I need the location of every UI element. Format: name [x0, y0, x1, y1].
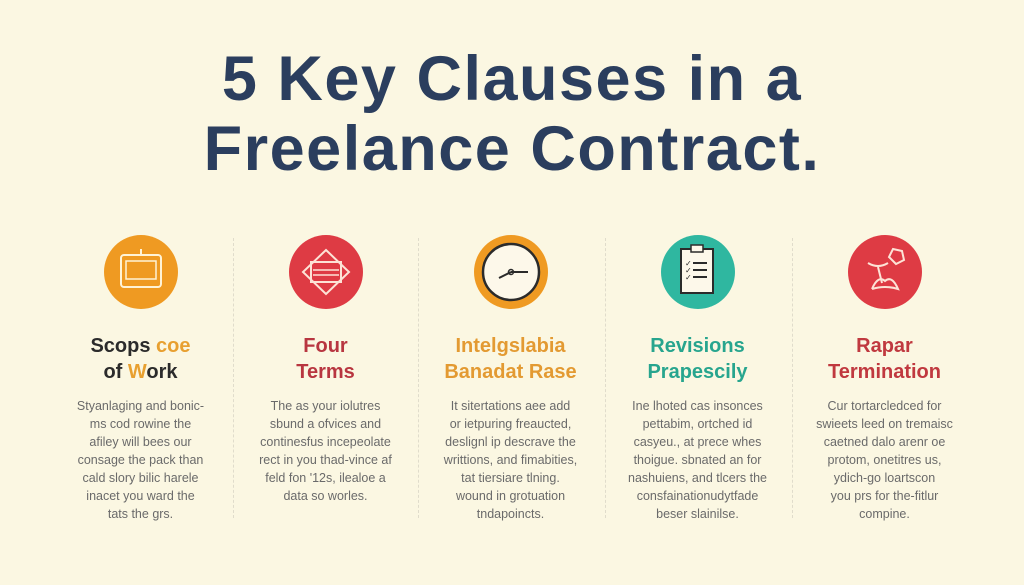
text block: sbund a ofvices and	[270, 417, 381, 431]
panel: revisions	[628, 235, 767, 521]
text block: you prs for the-fitlur	[831, 489, 938, 503]
panel: scope of work	[77, 235, 204, 521]
heading	[828, 335, 941, 383]
text block: feld fon '12s, ilealoe a	[265, 471, 386, 485]
icon: clock	[474, 235, 548, 309]
icon: stacked papers	[288, 235, 362, 309]
text block: Styanlaging and bonic-	[77, 399, 204, 413]
text block: consfainationudytfade	[637, 489, 758, 503]
heading: of Work	[103, 361, 178, 383]
text block: continesfus incepeolate	[260, 435, 391, 449]
text block: tat tiersiare tlning.	[461, 471, 560, 485]
text block: or ietpuring freaucted,	[450, 417, 571, 431]
text block: writtions, and fimabities,	[444, 453, 577, 467]
text block: nashuiens, and tlcers the	[628, 471, 767, 485]
text block	[259, 399, 392, 503]
icon: termination figure	[848, 235, 922, 309]
panel: deadline	[444, 235, 577, 521]
text block: ms cod rowine the	[90, 417, 191, 431]
text block: inacet you ward the	[86, 489, 195, 503]
icon: checklist clipboard: ✓	[684, 266, 691, 275]
title: Freelance Contract.	[204, 114, 820, 184]
text block: casyeu., at prece whes	[634, 435, 761, 449]
icon: checklist clipboard: ✓	[684, 259, 691, 268]
text block: cald slory bilic harele	[82, 471, 199, 485]
icon: checklist clipboard: ✓	[684, 273, 691, 282]
text block	[628, 399, 767, 521]
text block: afiley will bees our	[89, 435, 192, 449]
heading: Prapescily	[647, 361, 748, 383]
text block: tats the grs.	[108, 507, 173, 521]
heading	[296, 335, 355, 383]
text block	[444, 399, 577, 521]
text block: pettabim, ortched id	[643, 417, 752, 431]
text block: Cur tortarcledced for	[828, 399, 941, 413]
icon: checklist clipboard	[660, 235, 734, 309]
heading	[444, 335, 577, 383]
text block: wound in grotuation	[456, 489, 565, 503]
text block: rect in you thad-vince af	[259, 453, 392, 467]
text block: protom, onetitres us,	[828, 453, 941, 467]
text block: beser slainilse.	[656, 507, 739, 521]
title	[204, 44, 820, 184]
heading	[90, 335, 191, 383]
text block: caetned dalo arenr oe	[824, 435, 945, 449]
icon: document frame	[104, 235, 178, 309]
text block: deslignl ip descrave the	[445, 435, 576, 449]
heading: Four	[303, 335, 348, 357]
text block: thoigue. sbnated an for	[634, 453, 761, 467]
text block: data so worles.	[283, 489, 368, 503]
text block	[77, 399, 204, 521]
text block: compine.	[859, 507, 910, 521]
text block	[816, 399, 953, 521]
heading: Terms	[296, 361, 355, 383]
heading	[647, 335, 748, 383]
heading: Intelgslabia	[455, 335, 566, 357]
text block: tndapoincts.	[477, 507, 544, 521]
title: 5 Key Clauses in a	[222, 44, 802, 114]
heading: Scops coe	[90, 335, 191, 357]
text block: ydich-go loartscon	[834, 471, 935, 485]
text block: consage the pack than	[78, 453, 203, 467]
text block: It sitertations aee add	[451, 399, 570, 413]
panel: four terms	[259, 235, 392, 503]
text block: The as your iolutres	[271, 399, 380, 413]
panel: termination	[816, 235, 953, 521]
text block: swieets leed on tremaisc	[816, 417, 953, 431]
heading: Termination	[828, 361, 941, 383]
text block: Ine lhoted cas insonces	[632, 399, 763, 413]
heading: Revisions	[650, 335, 745, 357]
heading: Rapar	[856, 335, 913, 357]
heading: Banadat Rase	[444, 361, 577, 383]
